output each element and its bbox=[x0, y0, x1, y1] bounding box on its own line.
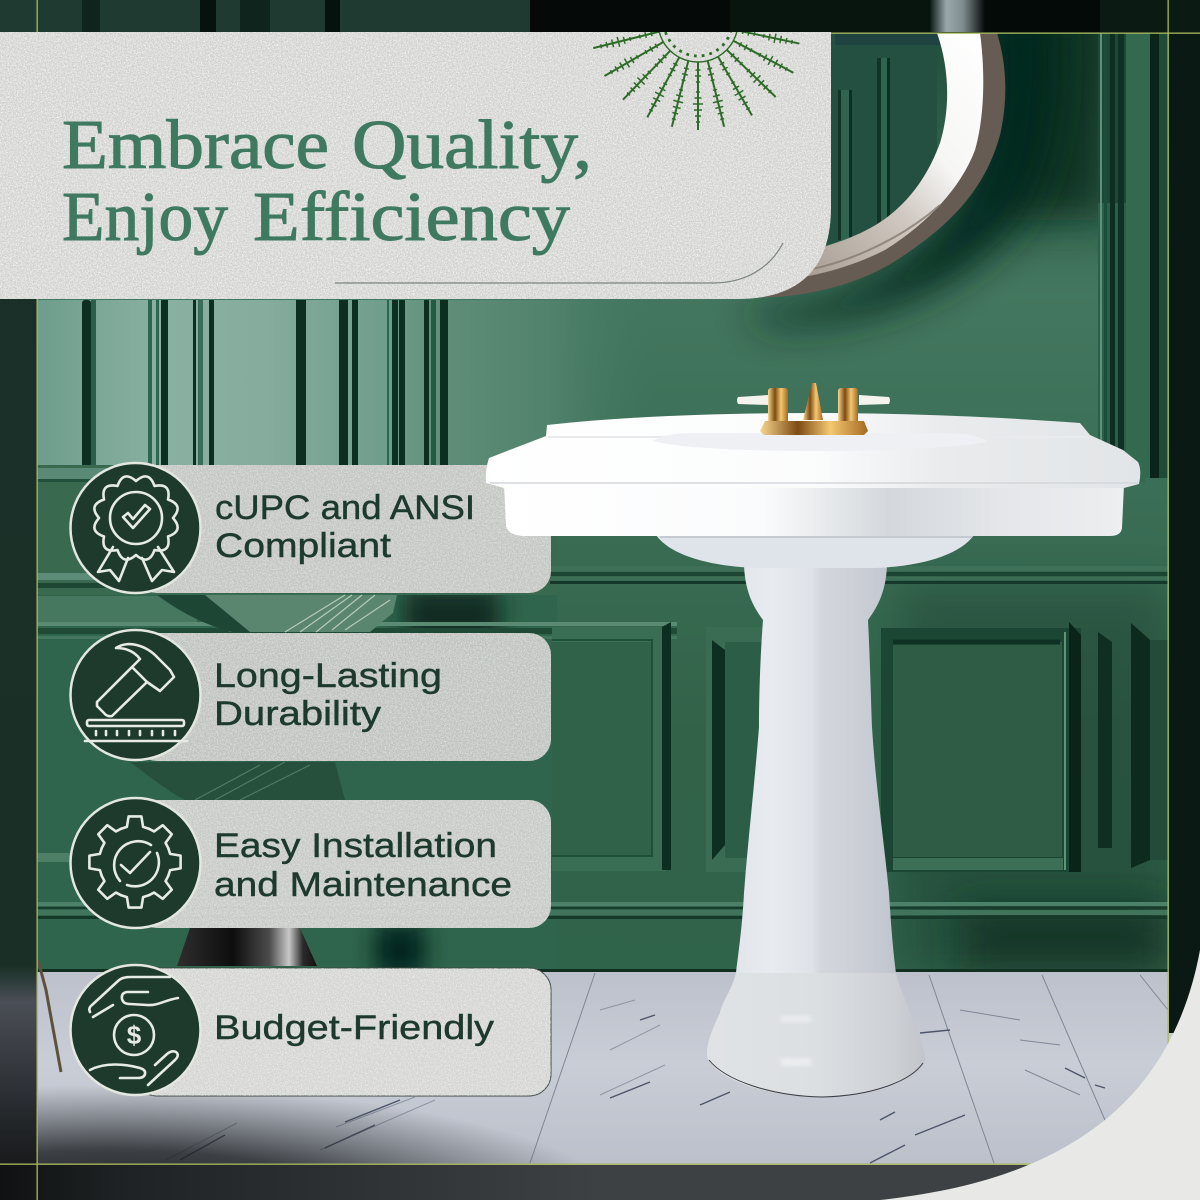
frame outer bbox=[745, 33, 1005, 297]
icon: rosette bbox=[94, 476, 178, 581]
title: Embrace bbox=[62, 107, 329, 184]
title: Enjoy bbox=[62, 179, 228, 256]
upper left wall moulding bbox=[37, 300, 658, 470]
header panel bbox=[0, 32, 831, 299]
label bbox=[215, 489, 475, 565]
label bbox=[214, 827, 512, 904]
gold faucet bbox=[737, 383, 890, 435]
basin underside bbox=[656, 535, 974, 568]
basin body bbox=[504, 485, 1124, 536]
label: and Maintenance bbox=[214, 866, 512, 904]
icon: hands and coin bbox=[89, 977, 178, 1085]
panel frames bbox=[552, 627, 666, 871]
light curved corner bottom right bbox=[880, 950, 1200, 1200]
basin bowl opening bbox=[653, 433, 987, 451]
gear icon circle bbox=[70, 798, 200, 928]
pill bbox=[135, 968, 551, 1096]
label: Budget-Friendly bbox=[214, 1009, 494, 1047]
sunburst ornament bbox=[593, 32, 800, 130]
title: Quality, bbox=[352, 107, 592, 184]
inner hairline bbox=[335, 243, 783, 283]
lower wall panels and rails bbox=[37, 465, 1168, 973]
upper right wall moulding bbox=[1098, 33, 1168, 484]
title bbox=[62, 107, 592, 256]
label: Compliant bbox=[215, 527, 392, 565]
dark planter bbox=[177, 928, 317, 966]
feature: compliant bbox=[70, 463, 551, 593]
hammer icon circle bbox=[70, 630, 200, 760]
pedestal sink bbox=[486, 383, 1140, 1097]
wall lighting bbox=[362, 34, 1168, 969]
badge icon circle bbox=[70, 463, 200, 593]
label: Durability bbox=[214, 695, 381, 733]
label: Easy Installation bbox=[214, 827, 497, 865]
icon: gear with check bbox=[89, 816, 181, 908]
budget icon circle bbox=[70, 965, 200, 1095]
label: Long-Lasting bbox=[214, 657, 442, 695]
sink rim bbox=[486, 413, 1140, 488]
pill bbox=[135, 633, 551, 761]
feature: installation bbox=[70, 798, 551, 928]
label bbox=[214, 657, 442, 733]
icon: hammer bbox=[85, 644, 187, 741]
pill bbox=[135, 465, 551, 593]
wall shadow of mirror bbox=[740, 0, 1057, 325]
round silver mirror bbox=[761, 34, 1006, 298]
feature: budget bbox=[70, 965, 551, 1096]
icon: hands and coin: $ bbox=[127, 1020, 142, 1050]
plant leaves bbox=[130, 595, 397, 800]
pedestal base bbox=[707, 973, 925, 1097]
mirror reflection moulding bbox=[835, 33, 950, 240]
label: cUPC and ANSI bbox=[215, 489, 475, 527]
feature: durability bbox=[70, 630, 551, 761]
title: Efficiency bbox=[253, 179, 570, 256]
pedestal column bbox=[707, 565, 925, 1097]
marble floor bbox=[37, 960, 1200, 1200]
pill bbox=[135, 800, 551, 928]
frame highlight bbox=[760, 33, 983, 280]
